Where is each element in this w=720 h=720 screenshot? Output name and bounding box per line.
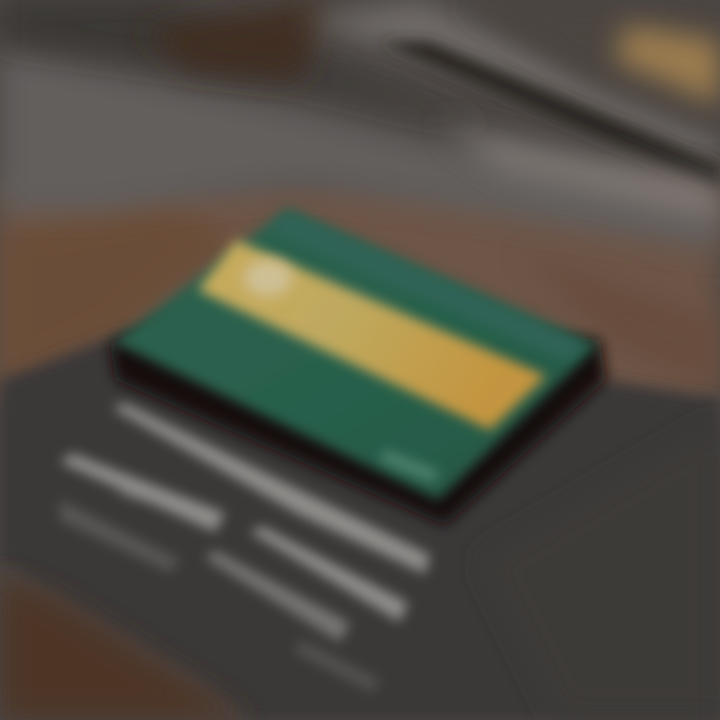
card logo xyxy=(380,450,440,482)
panel: wood corner bottom left xyxy=(0,575,250,720)
icon: green card xyxy=(114,208,598,500)
panel: gold object top right xyxy=(615,25,720,105)
gold stripe xyxy=(198,240,546,430)
card shadow xyxy=(110,300,606,525)
text lines on document xyxy=(60,403,430,692)
panel: dark document xyxy=(0,330,720,720)
